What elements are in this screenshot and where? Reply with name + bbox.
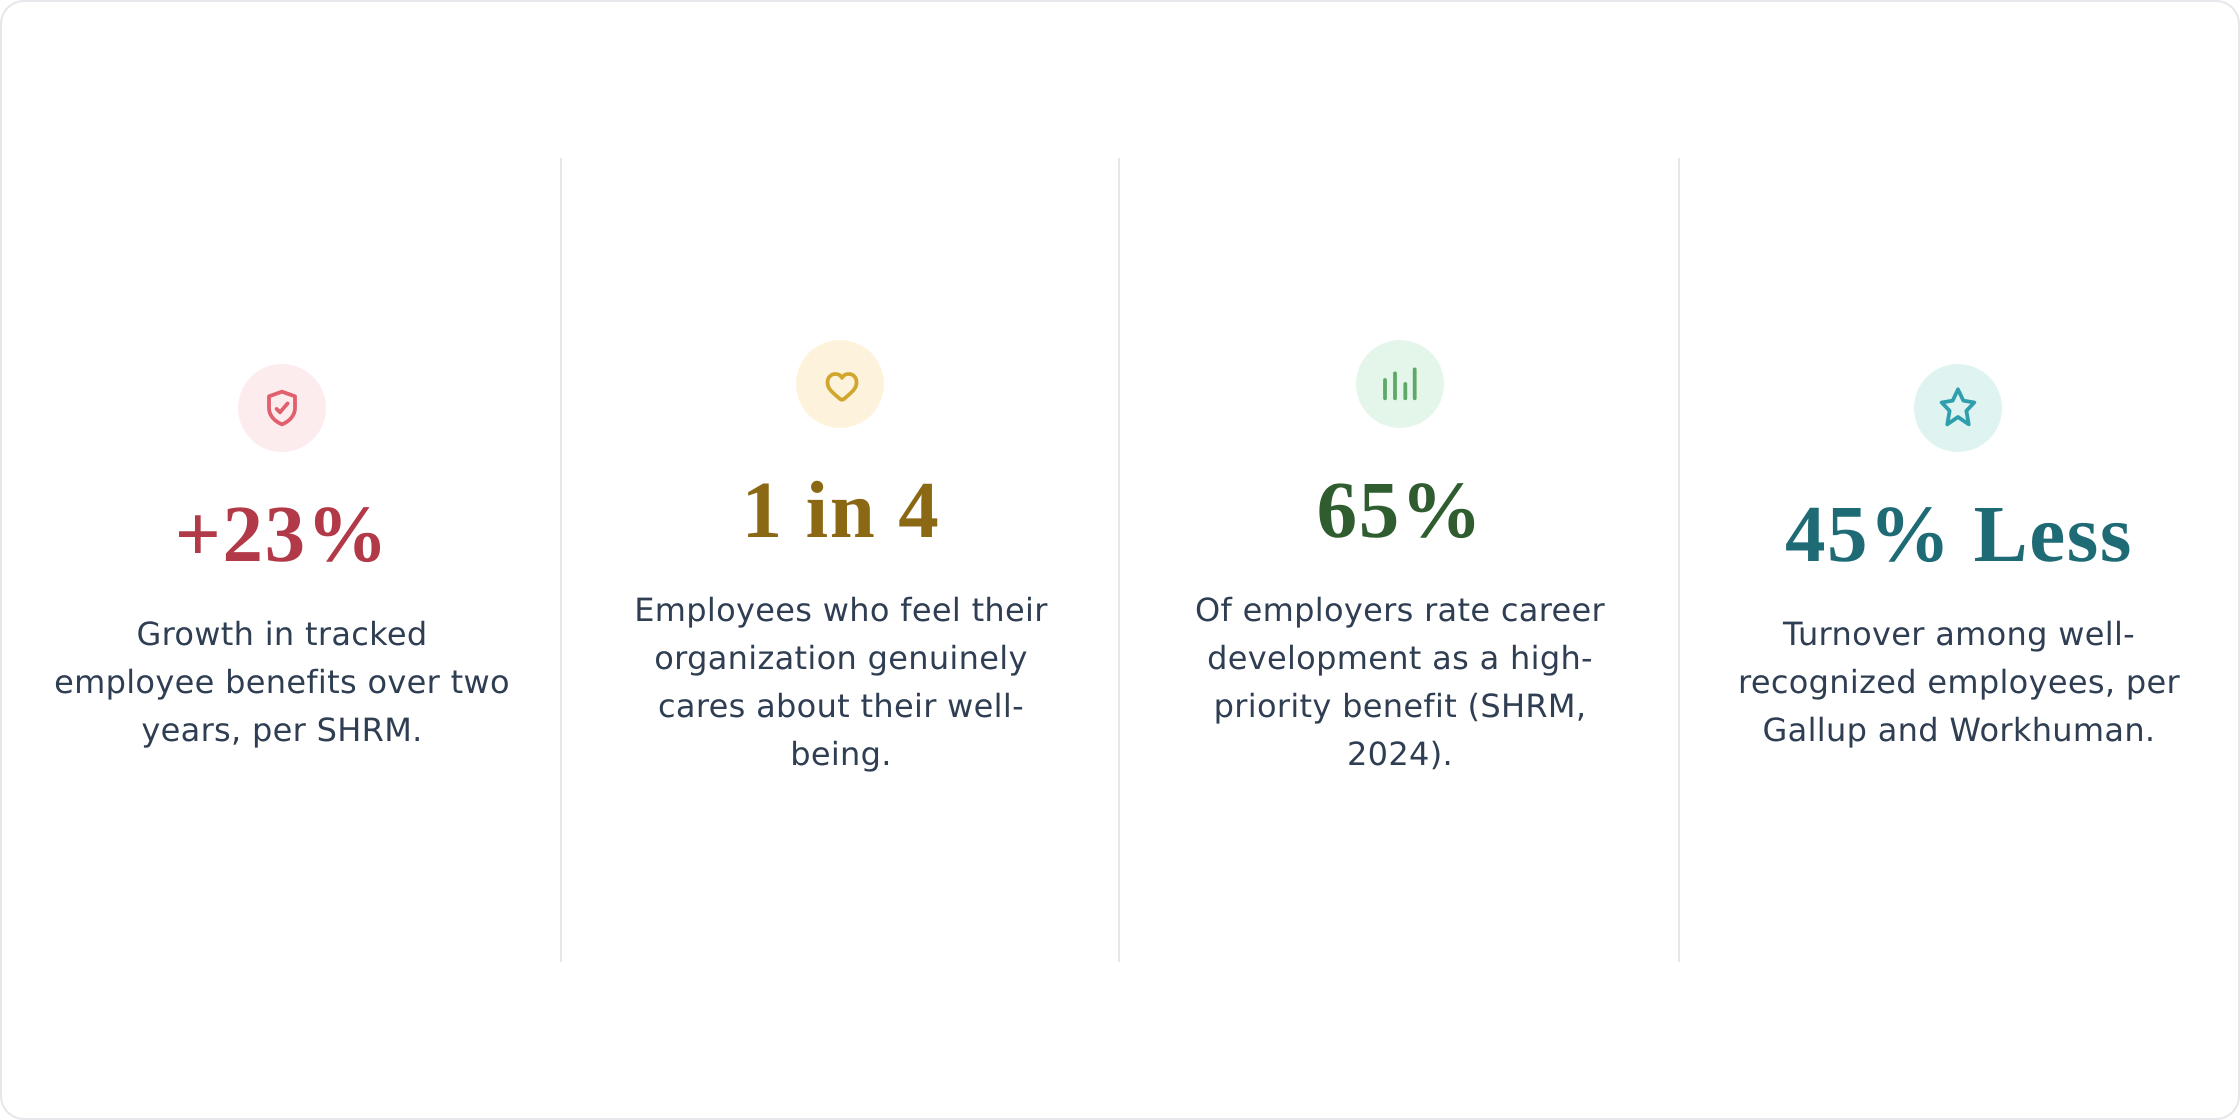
panel: 1 in 4 employees: [634, 340, 1048, 773]
description: career development: Of employers rate career: [1195, 591, 1605, 629]
description: cares: cares about their well-: [658, 687, 1024, 725]
description: career development: development as a high-: [1207, 639, 1593, 677]
description: turnover: Turnover among well-: [1783, 615, 2135, 653]
panel: 65% of employers: [1195, 340, 1605, 773]
description: turnover: [1738, 615, 2180, 749]
statistic: 1 in 4: 1 in 4: [742, 465, 940, 555]
description: turnover: Gallup and Workhuman.: [1763, 711, 2155, 749]
panel: 45% less turnover: [1738, 364, 2180, 749]
description: growth: years, per SHRM.: [141, 711, 423, 749]
description: career development: [1195, 591, 1605, 773]
icon: bar chart: [1356, 340, 1444, 428]
icon: heart: [796, 340, 884, 428]
icon: star: [1914, 364, 2002, 452]
statistic: 65%: 65%: [1317, 465, 1483, 555]
description: turnover: recognized employees, per: [1738, 663, 2180, 701]
description: cares: organization genuinely: [654, 639, 1028, 677]
icon: shield check: [238, 364, 326, 452]
description: cares: Employees who feel their: [634, 591, 1048, 629]
description: career development: priority benefit (SHRM,: [1214, 687, 1586, 725]
statistic: +23%: +23%: [175, 489, 389, 579]
statistic: 45% Less: 45% Less: [1785, 489, 2133, 579]
panel: +23% growth in benefits: [54, 364, 510, 749]
description: cares: being.: [790, 735, 892, 773]
description: career development: 2024).: [1347, 735, 1453, 773]
description: growth: [54, 615, 510, 749]
description: growth: Growth in tracked: [136, 615, 428, 653]
description: cares: [634, 591, 1048, 773]
description: growth: employee benefits over two: [54, 663, 510, 701]
